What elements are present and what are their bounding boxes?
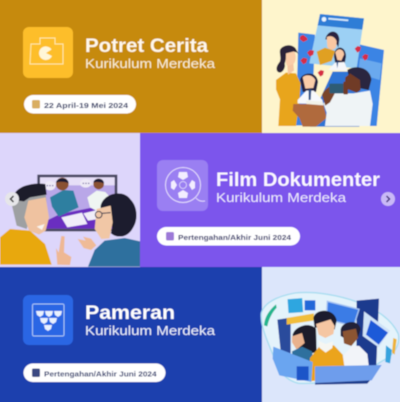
panel: Potret Cerita (0, 0, 262, 133)
heading: Potret Cerita: Potret Cerita (85, 36, 208, 57)
panel: illustration Film Dokumenter (0, 133, 140, 267)
arrow: previous (5, 192, 19, 206)
panel: Pameran (0, 267, 262, 402)
date pill (24, 364, 166, 382)
panel: illustration Potret Cerita (262, 0, 400, 133)
date pill: 22 April-19 Mei 2024 (44, 101, 129, 110)
date pill: Pertengahan/Akhir Juni 2024 (178, 233, 292, 242)
subheading: Kurikulum Merdeka (85, 323, 216, 338)
panel: Film Dokumenter (140, 133, 400, 267)
date pill (157, 227, 300, 246)
date pill: Pertengahan/Akhir Juni 2024 (44, 370, 157, 378)
heading: Film Dokumenter: Film Dokumenter (216, 170, 381, 191)
icon: film reel (157, 160, 208, 211)
panel: illustration Pameran (261, 267, 400, 402)
illustration: social cards and people (276, 14, 384, 127)
arrow: next (381, 192, 395, 206)
subheading: Kurikulum Merdeka (216, 190, 347, 205)
icon: gallery (23, 295, 73, 345)
icon: camera (23, 27, 73, 78)
subheading: Kurikulum Merdeka (85, 56, 216, 71)
heading: Pameran: Pameran (85, 303, 175, 324)
date pill (24, 95, 136, 114)
illustration: watching a film (0, 175, 140, 267)
illustration: visitors in gallery (261, 292, 399, 385)
